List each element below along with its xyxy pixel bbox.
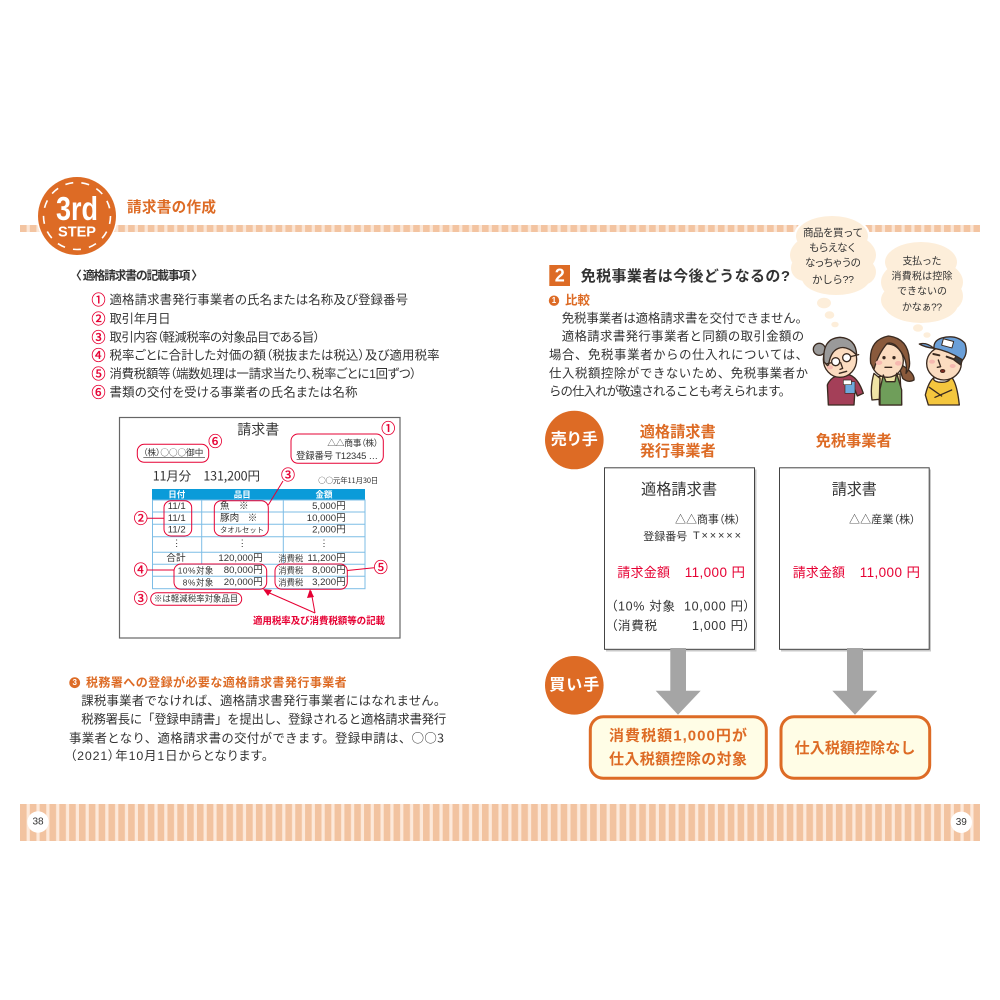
panel: qualified invoice bbox=[604, 468, 756, 652]
invoice table: 魚 bbox=[220, 500, 230, 512]
column header: qualified invoice issuer bbox=[640, 423, 716, 460]
invoice table: 11/2 bbox=[168, 524, 186, 536]
total amount: 11月分 131,200円 bbox=[153, 466, 260, 484]
illustration: three worried people bbox=[813, 336, 966, 405]
panel: ordinary invoice bbox=[780, 468, 931, 652]
column header: qualified invoice issuer: 適格請求書 bbox=[640, 423, 716, 441]
list rows: 消費税額等（端数処理は一請求当たり、税率ごとに1回ずつ） bbox=[110, 366, 416, 381]
invoice table: 2,000円 bbox=[312, 524, 346, 536]
column header: tax-exempt business: 免税事業者 bbox=[816, 432, 892, 450]
panel: comparison text bbox=[549, 293, 808, 399]
list rows: ④ bbox=[92, 348, 106, 364]
callout numbers: ③ bbox=[281, 467, 295, 483]
column header: qualified invoice issuer: 発行事業者 bbox=[640, 442, 716, 460]
body text: 事業者となり、適格請求書の交付ができます。登録申請は、○○3 bbox=[69, 729, 444, 747]
section title: 請求書の作成 bbox=[127, 198, 216, 216]
panel: qualified invoice: 請求金額 bbox=[617, 565, 670, 580]
panel: qualified invoice: （10% 対象 bbox=[611, 600, 675, 614]
badge: seller: 売り手 bbox=[551, 430, 598, 448]
list rows: ① bbox=[92, 292, 106, 308]
invoice table: ※ bbox=[248, 513, 257, 524]
body text bbox=[69, 693, 446, 763]
panel: invoice items list bbox=[70, 269, 440, 400]
panel: ordinary invoice: 請求金額 bbox=[793, 565, 845, 580]
invoice table: ⋮ bbox=[319, 538, 329, 550]
section heading 2: 免税事業者は今後どうなるの? bbox=[581, 267, 790, 285]
panel: qualified invoice: 適格請求書 bbox=[641, 482, 717, 498]
speech bubble: right: 消費税は控除 bbox=[892, 270, 952, 282]
step badge: 3rd STEP: 3rd bbox=[56, 190, 98, 227]
invoice table: ⋮ bbox=[172, 538, 181, 550]
body text: 税務署長に「登録申請書」を提出し、登録されると適格請求書発行 bbox=[81, 711, 446, 726]
invoice table: 10,000円 bbox=[307, 513, 346, 524]
result box: not deductible bbox=[781, 717, 930, 778]
speech bubble: right: かなぁ?? bbox=[902, 302, 942, 314]
invoice table: 3,200円 bbox=[312, 577, 346, 588]
panel: sample invoice bbox=[120, 418, 400, 638]
result box: deductible bbox=[590, 717, 766, 778]
reduced tax note: ※は軽減税率対象品目 bbox=[154, 593, 238, 603]
invoice table: 8%対象 bbox=[183, 577, 213, 587]
subheading: 3 bbox=[72, 678, 77, 687]
invoice table: ⋮ bbox=[238, 538, 247, 550]
body text: 課税事業者でなければ、適格請求書発行事業者にはなれません。 bbox=[81, 693, 446, 708]
panel: ordinary invoice: △△産業（株） bbox=[849, 511, 916, 527]
invoice table: 11/1 bbox=[168, 501, 186, 512]
section heading 2: 2 bbox=[555, 266, 565, 286]
subheading: 比較 bbox=[565, 293, 590, 308]
invoice table: 10%対象 bbox=[178, 565, 213, 575]
callout numbers: ⑤ bbox=[374, 560, 388, 576]
callout numbers: ③ bbox=[134, 590, 148, 606]
list rows bbox=[92, 292, 440, 400]
page number 38 bbox=[27, 811, 49, 833]
invoice table: 11/1 bbox=[168, 513, 186, 524]
addressee: （株）○○○御中 bbox=[143, 446, 203, 458]
step badge: 3rd STEP: STEP bbox=[58, 225, 96, 241]
panel: qualified invoice: 11,000 円 bbox=[685, 565, 745, 580]
speech bubble: left bbox=[790, 216, 876, 327]
panel: qualified invoice: 1,000 円） bbox=[692, 619, 750, 633]
list rows: ⑥ bbox=[92, 384, 106, 400]
invoice table: 金額 bbox=[315, 490, 333, 500]
result box: not deductible: 仕入税額控除なし bbox=[795, 739, 915, 757]
invoice table: 80,000円 bbox=[224, 565, 263, 576]
body text: （2021）年10月1日からとなります。 bbox=[70, 749, 268, 763]
page number 39: 39 bbox=[956, 817, 967, 828]
invoice table: 消費税 bbox=[278, 553, 304, 563]
body: 適格請求書発行事業者と同額の取引金額の bbox=[562, 329, 804, 344]
subheading: 1 bbox=[552, 296, 557, 305]
subheading: 税務署への登録が必要な適格請求書発行事業者 bbox=[86, 675, 347, 690]
speech bubble: right: 支払った bbox=[902, 254, 942, 268]
list rows: 取引年月日 bbox=[110, 312, 170, 326]
invoice table: 11,200円 bbox=[307, 553, 346, 564]
callout numbers: ⑥ bbox=[208, 434, 222, 450]
list heading: 〈 適格請求書の記載事項 〉 bbox=[70, 269, 203, 283]
issuer: 登録番号 T12345 … bbox=[296, 450, 378, 461]
invoice table: 豚肉 bbox=[220, 512, 239, 524]
arrow: right column bbox=[832, 648, 877, 715]
callout caption: 適用税率及び消費税額等の記載 bbox=[253, 615, 385, 627]
issue date: ○○元年11月30日 bbox=[318, 475, 378, 486]
callout numbers: ② bbox=[134, 510, 148, 526]
page number 38: 38 bbox=[32, 816, 44, 828]
invoice table bbox=[152, 489, 365, 589]
speech bubble: right: できないの bbox=[897, 286, 947, 298]
page number 39 bbox=[951, 812, 972, 833]
invoice table: 消費税 bbox=[278, 565, 304, 575]
speech bubble: right bbox=[881, 242, 963, 338]
invoice table: 20,000円 bbox=[224, 577, 263, 588]
callout numbers: ① bbox=[381, 420, 395, 436]
list rows: ③ bbox=[92, 330, 106, 346]
icon: elderly woman bbox=[813, 337, 863, 405]
speech bubble: left: なっちゃうの bbox=[805, 257, 861, 269]
red arrowheads bbox=[263, 589, 314, 598]
body: 免税事業者は適格請求書を交付できません。 bbox=[562, 310, 808, 325]
panel: qualified invoice: T××××× bbox=[693, 530, 741, 542]
panel: qualified invoice: 10,000 円） bbox=[684, 600, 750, 614]
badge: buyer: 買い手 bbox=[549, 675, 599, 694]
badge: buyer bbox=[545, 656, 604, 715]
body: 場合、免税事業者からの仕入れについては、 bbox=[549, 347, 808, 362]
issuer bbox=[296, 436, 378, 461]
body: 仕入税額控除ができないため、免税事業者か bbox=[549, 365, 808, 380]
callout numbers: ④ bbox=[134, 562, 148, 578]
callout numbers bbox=[134, 420, 395, 606]
subheading bbox=[549, 293, 590, 308]
body: らの仕入れが敬遠されることも考えられます。 bbox=[549, 384, 791, 399]
list rows: ② bbox=[92, 311, 106, 327]
list rows: 税率ごとに合計した対価の額（税抜または税込）及び適用税率 bbox=[110, 348, 440, 363]
invoice table: 品目 bbox=[234, 490, 251, 500]
invoice table: 8,000円 bbox=[312, 565, 346, 576]
panel: ordinary invoice: 11,000 円 bbox=[860, 565, 920, 580]
badge: seller bbox=[545, 411, 604, 469]
red callouts bbox=[137, 434, 383, 613]
step badge: 3rd STEP bbox=[36, 176, 118, 256]
speech bubble: left: かしら?? bbox=[812, 274, 854, 286]
speech bubble: left: 商品を買って bbox=[803, 226, 863, 239]
body bbox=[549, 310, 808, 399]
panel: qualified invoice: △△商事（株） bbox=[675, 511, 741, 527]
panel: tax office registration bbox=[69, 675, 446, 763]
invoice table: 5,000円 bbox=[312, 501, 346, 512]
result box: deductible: 仕入税額控除の対象 bbox=[609, 750, 747, 768]
invoice title: 請求書 bbox=[237, 421, 279, 437]
list rows: 取引内容（軽減税率の対象品目である旨） bbox=[110, 330, 320, 345]
speech bubble: left: もらえなく bbox=[809, 242, 857, 254]
invoice table: 消費税 bbox=[278, 577, 304, 587]
invoice table: 合計 bbox=[166, 552, 186, 564]
list rows: ⑤ bbox=[92, 366, 106, 382]
result box: deductible: 消費税額1,000円が bbox=[609, 726, 747, 744]
panel: ordinary invoice: 請求書 bbox=[832, 482, 877, 498]
icon: man in blue cap bbox=[919, 337, 966, 405]
issuer: △△商事（株） bbox=[327, 436, 378, 449]
panel: qualified invoice: （消費税 bbox=[611, 618, 657, 633]
invoice table: 日付 bbox=[168, 490, 186, 500]
invoice table: タオルセット bbox=[220, 526, 264, 534]
list rows: 適格請求書発行事業者の氏名または名称及び登録番号 bbox=[110, 292, 408, 307]
arrow: left column bbox=[656, 648, 701, 715]
list rows: 書類の交付を受ける事業者の氏名または名称 bbox=[110, 384, 358, 399]
invoice table: ※ bbox=[239, 501, 249, 512]
invoice table: 120,000円 bbox=[218, 553, 263, 564]
panel: qualified invoice: 登録番号 bbox=[643, 528, 687, 544]
icon: woman with apron bbox=[870, 336, 914, 405]
